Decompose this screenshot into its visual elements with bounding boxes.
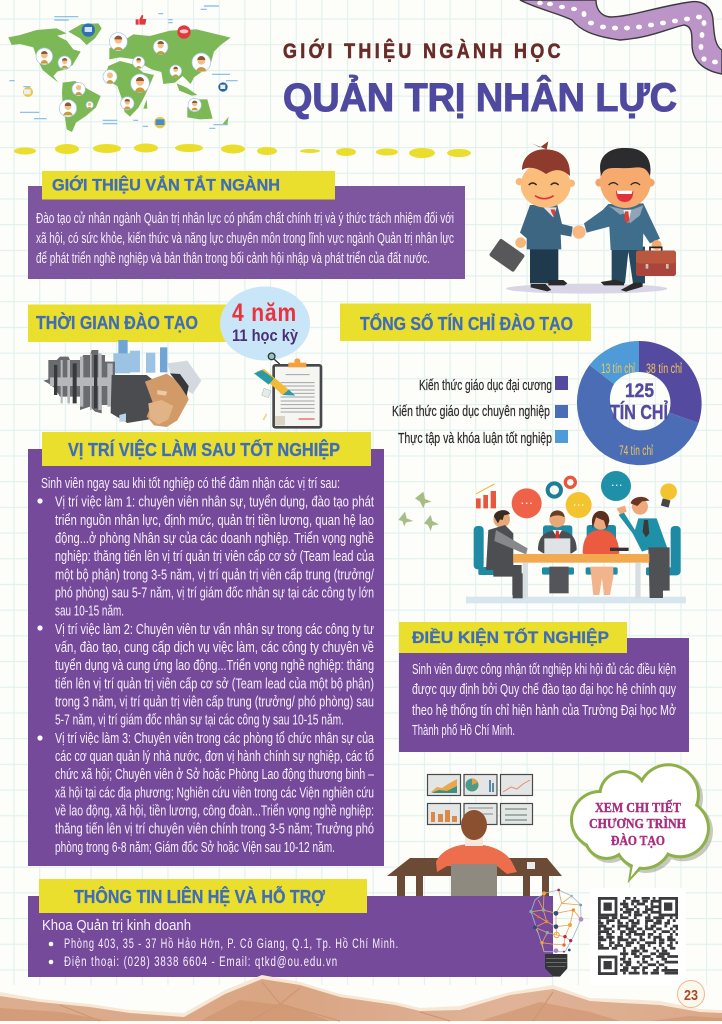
conditions text bbox=[412, 661, 676, 739]
legend: Kiến thức giáo dục chuyên nghiệp bbox=[392, 403, 550, 420]
dashboards bbox=[428, 774, 532, 824]
panel: contact bbox=[28, 879, 553, 977]
panel: credits heading: TỔNG SỐ TÍN CHỈ ĐÀO TẠO bbox=[360, 313, 573, 334]
contact text: Phòng 403, 35 - 37 Hồ Hảo Hớn, P. Cô Giang, Q.1, Tp. Hồ Chí Minh. bbox=[64, 936, 399, 951]
donut chart: 13 tín chỉ bbox=[601, 361, 635, 376]
panel: training time heading bbox=[28, 304, 228, 342]
continents bbox=[8, 23, 231, 132]
jobs text: Vị trí việc làm 1: chuyên viên nhân sự, tuyển dụng, đào tạo phát bbox=[55, 494, 375, 511]
icon: network light bulb bbox=[529, 889, 583, 977]
jobs text: trong 3 năm, vị trí quản trị viên cấp trung (trưởng/ phó phòng) sau bbox=[55, 694, 374, 710]
chart icon bbox=[476, 484, 496, 508]
intro text: xã hội, có sức khỏe, kiến thức và năng lực chuyên môn trong lĩnh vực ngành Quản trị nhân lực bbox=[36, 230, 454, 247]
contact text: Khoa Quản trị kinh doanh bbox=[42, 918, 191, 934]
illustration: two businessmen shaking hands bbox=[489, 141, 676, 294]
decorative green stars bbox=[398, 492, 439, 531]
avatars bbox=[36, 33, 211, 117]
intro heading bbox=[42, 171, 335, 200]
jobs heading bbox=[42, 432, 371, 466]
legend: Kiến thức giáo dục đại cương bbox=[419, 377, 552, 394]
donut chart: 125 bbox=[625, 381, 654, 402]
illustration: handshake and skyline bbox=[43, 340, 201, 427]
callout: speech cloud bbox=[570, 763, 713, 883]
contact text: Điện thoại: (028) 3838 6604 - Email: qtkd@ou.edu.vn bbox=[64, 954, 338, 969]
right man bbox=[584, 148, 676, 292]
jobs text: chức xã hội; Chuyên viên ở Sở hoặc Phòng Lao động thương binh – bbox=[55, 766, 374, 783]
world map with people bbox=[8, 6, 238, 132]
intro text: Đào tạo cử nhân ngành Quản trị nhân lực có phẩm chất chính trị và ý thức trách nhiệm đối với bbox=[36, 210, 454, 227]
contact heading: THÔNG TIN LIÊN HỆ VÀ HỖ TRỢ bbox=[74, 886, 325, 907]
callout: 4 years bbox=[220, 286, 310, 360]
jobs text: nghiệp: thăng tiến lên vị trí quản trị viên cấp cơ sở (Team lead của bbox=[55, 548, 374, 565]
table bbox=[513, 548, 649, 599]
contact text bbox=[42, 918, 399, 969]
left man bbox=[489, 141, 586, 291]
callout: 4 years: 11 học kỳ bbox=[232, 326, 298, 345]
jobs text: thăng tiến lên vị trí chuyên viên chính trong 3-5 năm; Trưởng phó bbox=[55, 821, 374, 838]
callout: speech cloud: XEM CHI TIẾT bbox=[595, 799, 682, 816]
panel: training time heading: THỜI GIAN ĐÀO TẠO bbox=[36, 312, 198, 333]
callout: speech cloud: CHƯƠNG TRÌNH bbox=[589, 815, 686, 832]
illustration: meeting bbox=[466, 471, 686, 603]
jobs text: các cơ quan quản lý nhà nước, đơn vị hành chính sự nghiệp, các tổ bbox=[55, 748, 374, 765]
conditions heading: ĐIỀU KIỆN TỐT NGHIỆP bbox=[412, 627, 609, 647]
jobs text: về lao động, xã hội, tiền lương, công đoàn...Triển vọng nghề nghiệp: bbox=[55, 802, 374, 820]
social icons bbox=[23, 15, 228, 128]
panel: jobs after graduation bbox=[28, 432, 384, 866]
page number bbox=[678, 980, 704, 1008]
intro text bbox=[36, 210, 454, 267]
jobs text: tuyển dụng và cung ứng lao động...Triển vọng nghề nghiệp: thăng bbox=[55, 657, 374, 674]
donut chart: 38 tín chỉ bbox=[646, 361, 682, 376]
conditions heading bbox=[399, 622, 627, 653]
speech bubbles and gears bbox=[512, 471, 631, 518]
contact heading bbox=[39, 879, 367, 913]
intro text: để phát triển nghề nghiệp và bản thân trong bối cảnh hội nhập và phát triển của đất nước. bbox=[36, 250, 430, 267]
jobs text: sau 10-15 năm. bbox=[55, 603, 124, 620]
donut chart: TÍN CHỈ bbox=[610, 401, 668, 424]
jobs text: một bộ phận) trong 3-5 năm, vị trí quản trị viên cấp trung (trưởng/ bbox=[55, 566, 375, 583]
jobs text: phòng trong 6-8 năm; Giám đốc Sở hoặc Viện sau 10-12 năm. bbox=[55, 839, 335, 856]
icon: clipboard with pen bbox=[254, 353, 322, 429]
jobs text: vấn, đào tạo, cung cấp dịch vụ việc làm, các công ty chuyên về bbox=[55, 639, 374, 656]
desk bbox=[387, 858, 562, 898]
conditions text: Thành phố Hồ Chí Minh. bbox=[412, 722, 515, 739]
donut chart: 74 tín chỉ bbox=[619, 443, 653, 458]
legend bbox=[392, 376, 568, 447]
jobs text: 5-7 năm, vị trí giám đốc nhân sự tại các công ty sau 10-15 năm. bbox=[55, 712, 344, 729]
torn paper footer bbox=[0, 975, 722, 1021]
subtitle: GIỚI THIỆU NGÀNH HỌC bbox=[283, 39, 564, 63]
jobs text: tiến lên vị trí quản trị viên cấp cơ sở (Team lead của một bộ phận) bbox=[55, 675, 374, 692]
jobs text: phó phòng) sau 5-7 năm, vị trí giám đốc nhân sự tại các công ty lớn bbox=[55, 584, 374, 602]
illustration: person at desk with dashboards bbox=[387, 774, 562, 898]
people bbox=[486, 497, 670, 598]
jobs text: Sinh viên ngay sau khi tốt nghiệp có thể đảm nhận các vị trí sau: bbox=[41, 475, 340, 492]
map dashes bbox=[9, 6, 238, 128]
jobs text: động...ở phòng Nhân sự của các doanh nghiệp. Triển vọng nghề bbox=[55, 530, 374, 547]
panel: credits heading bbox=[340, 304, 591, 341]
callout: speech cloud: ĐÀO TẠO bbox=[611, 832, 665, 849]
QR code bbox=[590, 888, 686, 985]
jobs text: Vị trí việc làm 2: Chuyên viên tư vấn nhân sự trong các công ty tư bbox=[55, 621, 374, 638]
main title: QUẢN TRỊ NHÂN LỰC bbox=[283, 74, 677, 120]
callout: 4 years: 4 năm bbox=[232, 299, 297, 327]
legend: Thực tập và khóa luận tốt nghiệp bbox=[398, 430, 552, 447]
person bbox=[436, 844, 517, 874]
jobs heading: VỊ TRÍ VIỆC LÀM SAU TỐT NGHIỆP bbox=[68, 439, 340, 460]
yellow brush dots bbox=[14, 144, 471, 158]
jobs text: xã hội tại các địa phương; Nghiên cứu viên trong các Viện nghiên cứu bbox=[55, 784, 374, 801]
decorative worm road bbox=[520, 0, 722, 74]
donut chart bbox=[577, 341, 702, 465]
icon: light bulb bbox=[660, 483, 677, 508]
chairs bbox=[474, 525, 681, 575]
intro heading: GIỚI THIỆU VẮN TẮT NGÀNH bbox=[52, 176, 280, 194]
jobs text bbox=[37, 475, 375, 856]
jobs text: triển nguồn nhân lực, định mức, quản trị tiền lương, quan hệ lao bbox=[55, 512, 374, 529]
page number: 23 bbox=[684, 987, 698, 1004]
panel: intro bbox=[28, 171, 465, 279]
panel: graduation conditions bbox=[399, 622, 689, 752]
jobs text: Vị trí việc làm 3: Chuyên viên trong các phòng tổ chức nhân sự của bbox=[55, 730, 374, 747]
